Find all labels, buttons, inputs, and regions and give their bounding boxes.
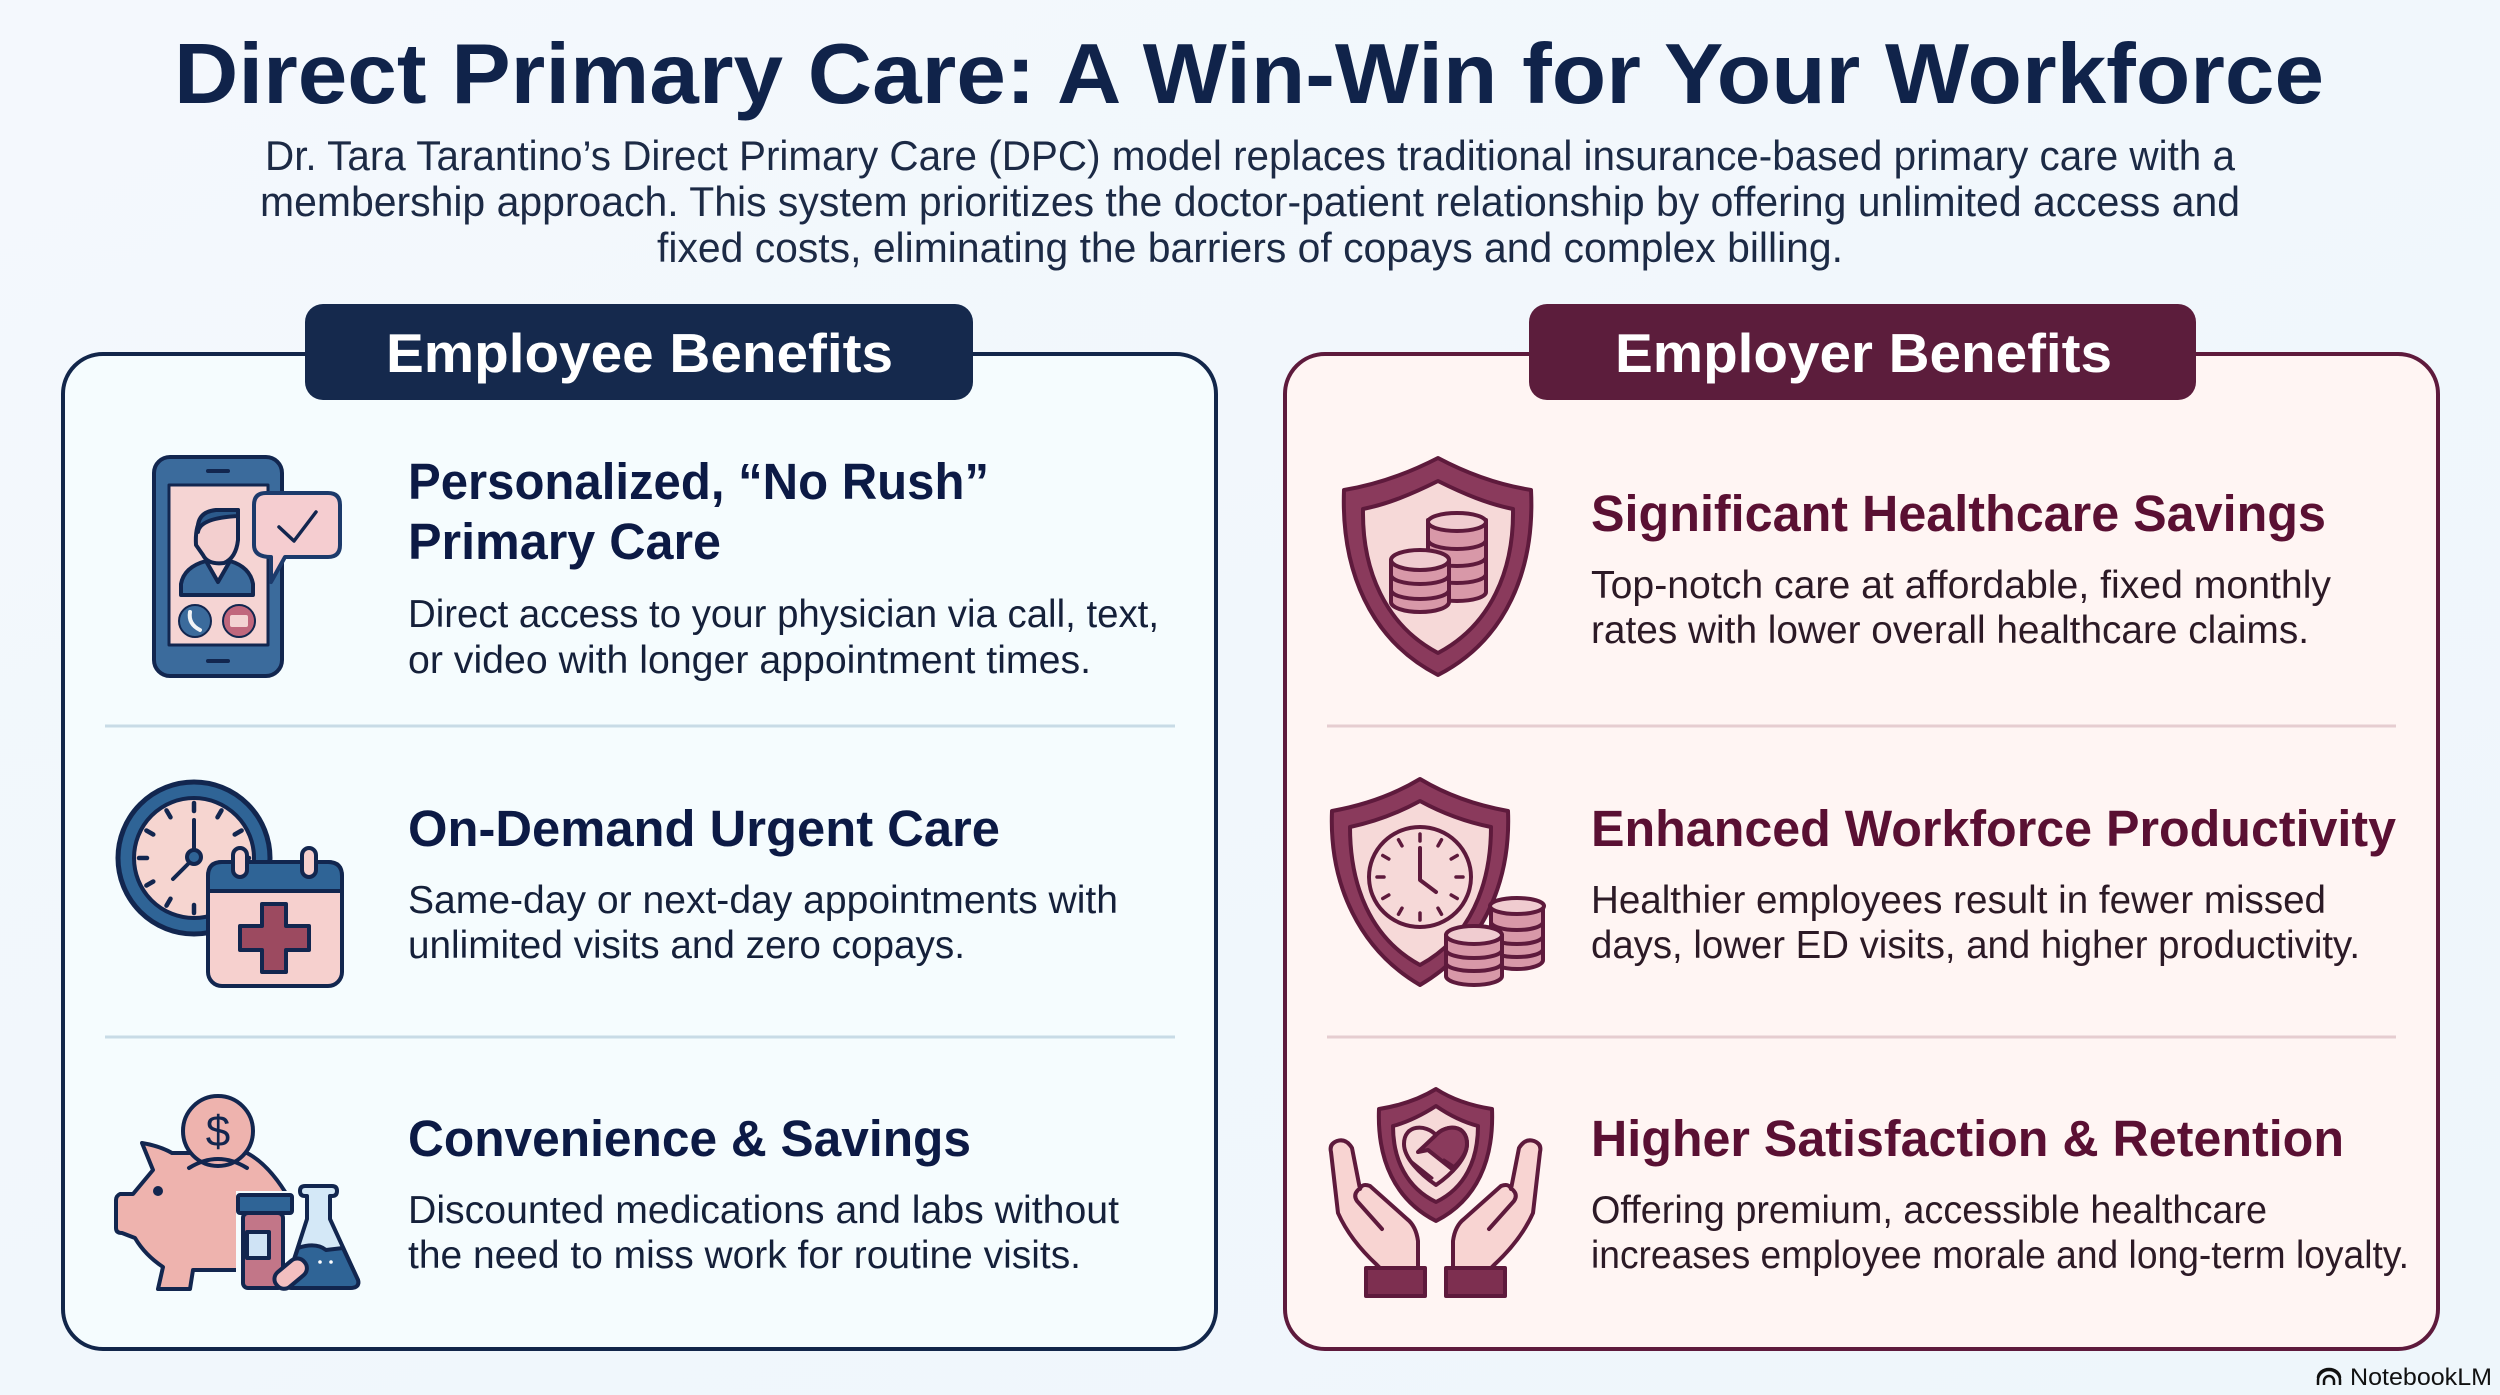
employee benefits tab [305,304,973,400]
heading: convenience and savings: Convenience & Savings [408,1110,971,1167]
employer benefits tab [1529,304,2196,400]
icon: piggy bank and medication: $ [206,1107,230,1156]
text: convenience description [408,1189,1119,1277]
text: productivity description [1591,879,2360,967]
text: retention description [1591,1189,2409,1277]
text: productivity description: days, lower ED visits, and higher productivity. [1591,924,2360,967]
heading: personalized care: Primary Care [408,513,721,570]
heading: on-demand urgent care: On-Demand Urgent Care [408,800,1000,857]
text: retention description: Offering premium, accessible healthcare [1591,1189,2267,1232]
text: savings description: rates with lower overall healthcare claims. [1591,609,2309,652]
icon: shield with coins [1344,458,1531,675]
intro paragraph: fixed costs, eliminating the barriers of copays and complex billing. [657,224,1843,271]
text: productivity description: Healthier employees result in fewer missed [1591,879,2326,922]
employer benefits tab: Employer Benefits [1615,322,2112,384]
text: convenience description: the need to miss work for routine visits. [408,1234,1081,1277]
icon: hands holding shield with handshake [1331,1089,1540,1296]
icon: piggy bank and medication [116,1096,358,1292]
text: savings description: Top-notch care at affordable, fixed monthly [1591,564,2332,607]
text: retention description: increases employee morale and long-term loyalty. [1591,1234,2409,1277]
icon: clock and calendar [118,782,342,986]
text: on-demand description: Same-day or next-day appointments with [408,879,1118,922]
heading: workforce productivity: Enhanced Workforce Productivity [1591,800,2397,857]
heading: healthcare savings: Significant Healthcare Savings [1591,485,2326,542]
heading: satisfaction and retention: Higher Satisfaction & Retention [1591,1110,2344,1167]
text: personalized care description: or video with longer appointment times. [408,639,1091,682]
panel: employee benefits [63,304,1216,1349]
text: savings description [1591,564,2332,652]
panel: employer benefits [1285,304,2438,1349]
intro paragraph [260,132,2240,271]
text: personalized care description: Direct access to your physician via call, text, [408,593,1159,636]
text: convenience description: Discounted medications and labs without [408,1189,1119,1232]
text: personalized care description [408,593,1159,682]
heading: personalized care: Personalized, “No Rush” [408,453,989,510]
intro paragraph: membership approach. This system prioritizes the doctor-patient relationship by offering unlimited access and [260,178,2240,225]
employee benefits tab: Employee Benefits [386,322,893,384]
text: on-demand description: unlimited visits and zero copays. [408,924,965,967]
title: Direct Primary Care: A Win-Win for Your Workforce [174,27,2324,122]
icon: shield with clock and coins [1332,779,1544,985]
NotebookLM watermark: NotebookLM [2350,1364,2492,1391]
heading: personalized care [408,453,989,570]
icon: phone video call [154,457,340,676]
text: on-demand description [408,879,1118,967]
intro paragraph: Dr. Tara Tarantino’s Direct Primary Care (DPC) model replaces traditional insurance-based primary care with a [265,132,2236,179]
